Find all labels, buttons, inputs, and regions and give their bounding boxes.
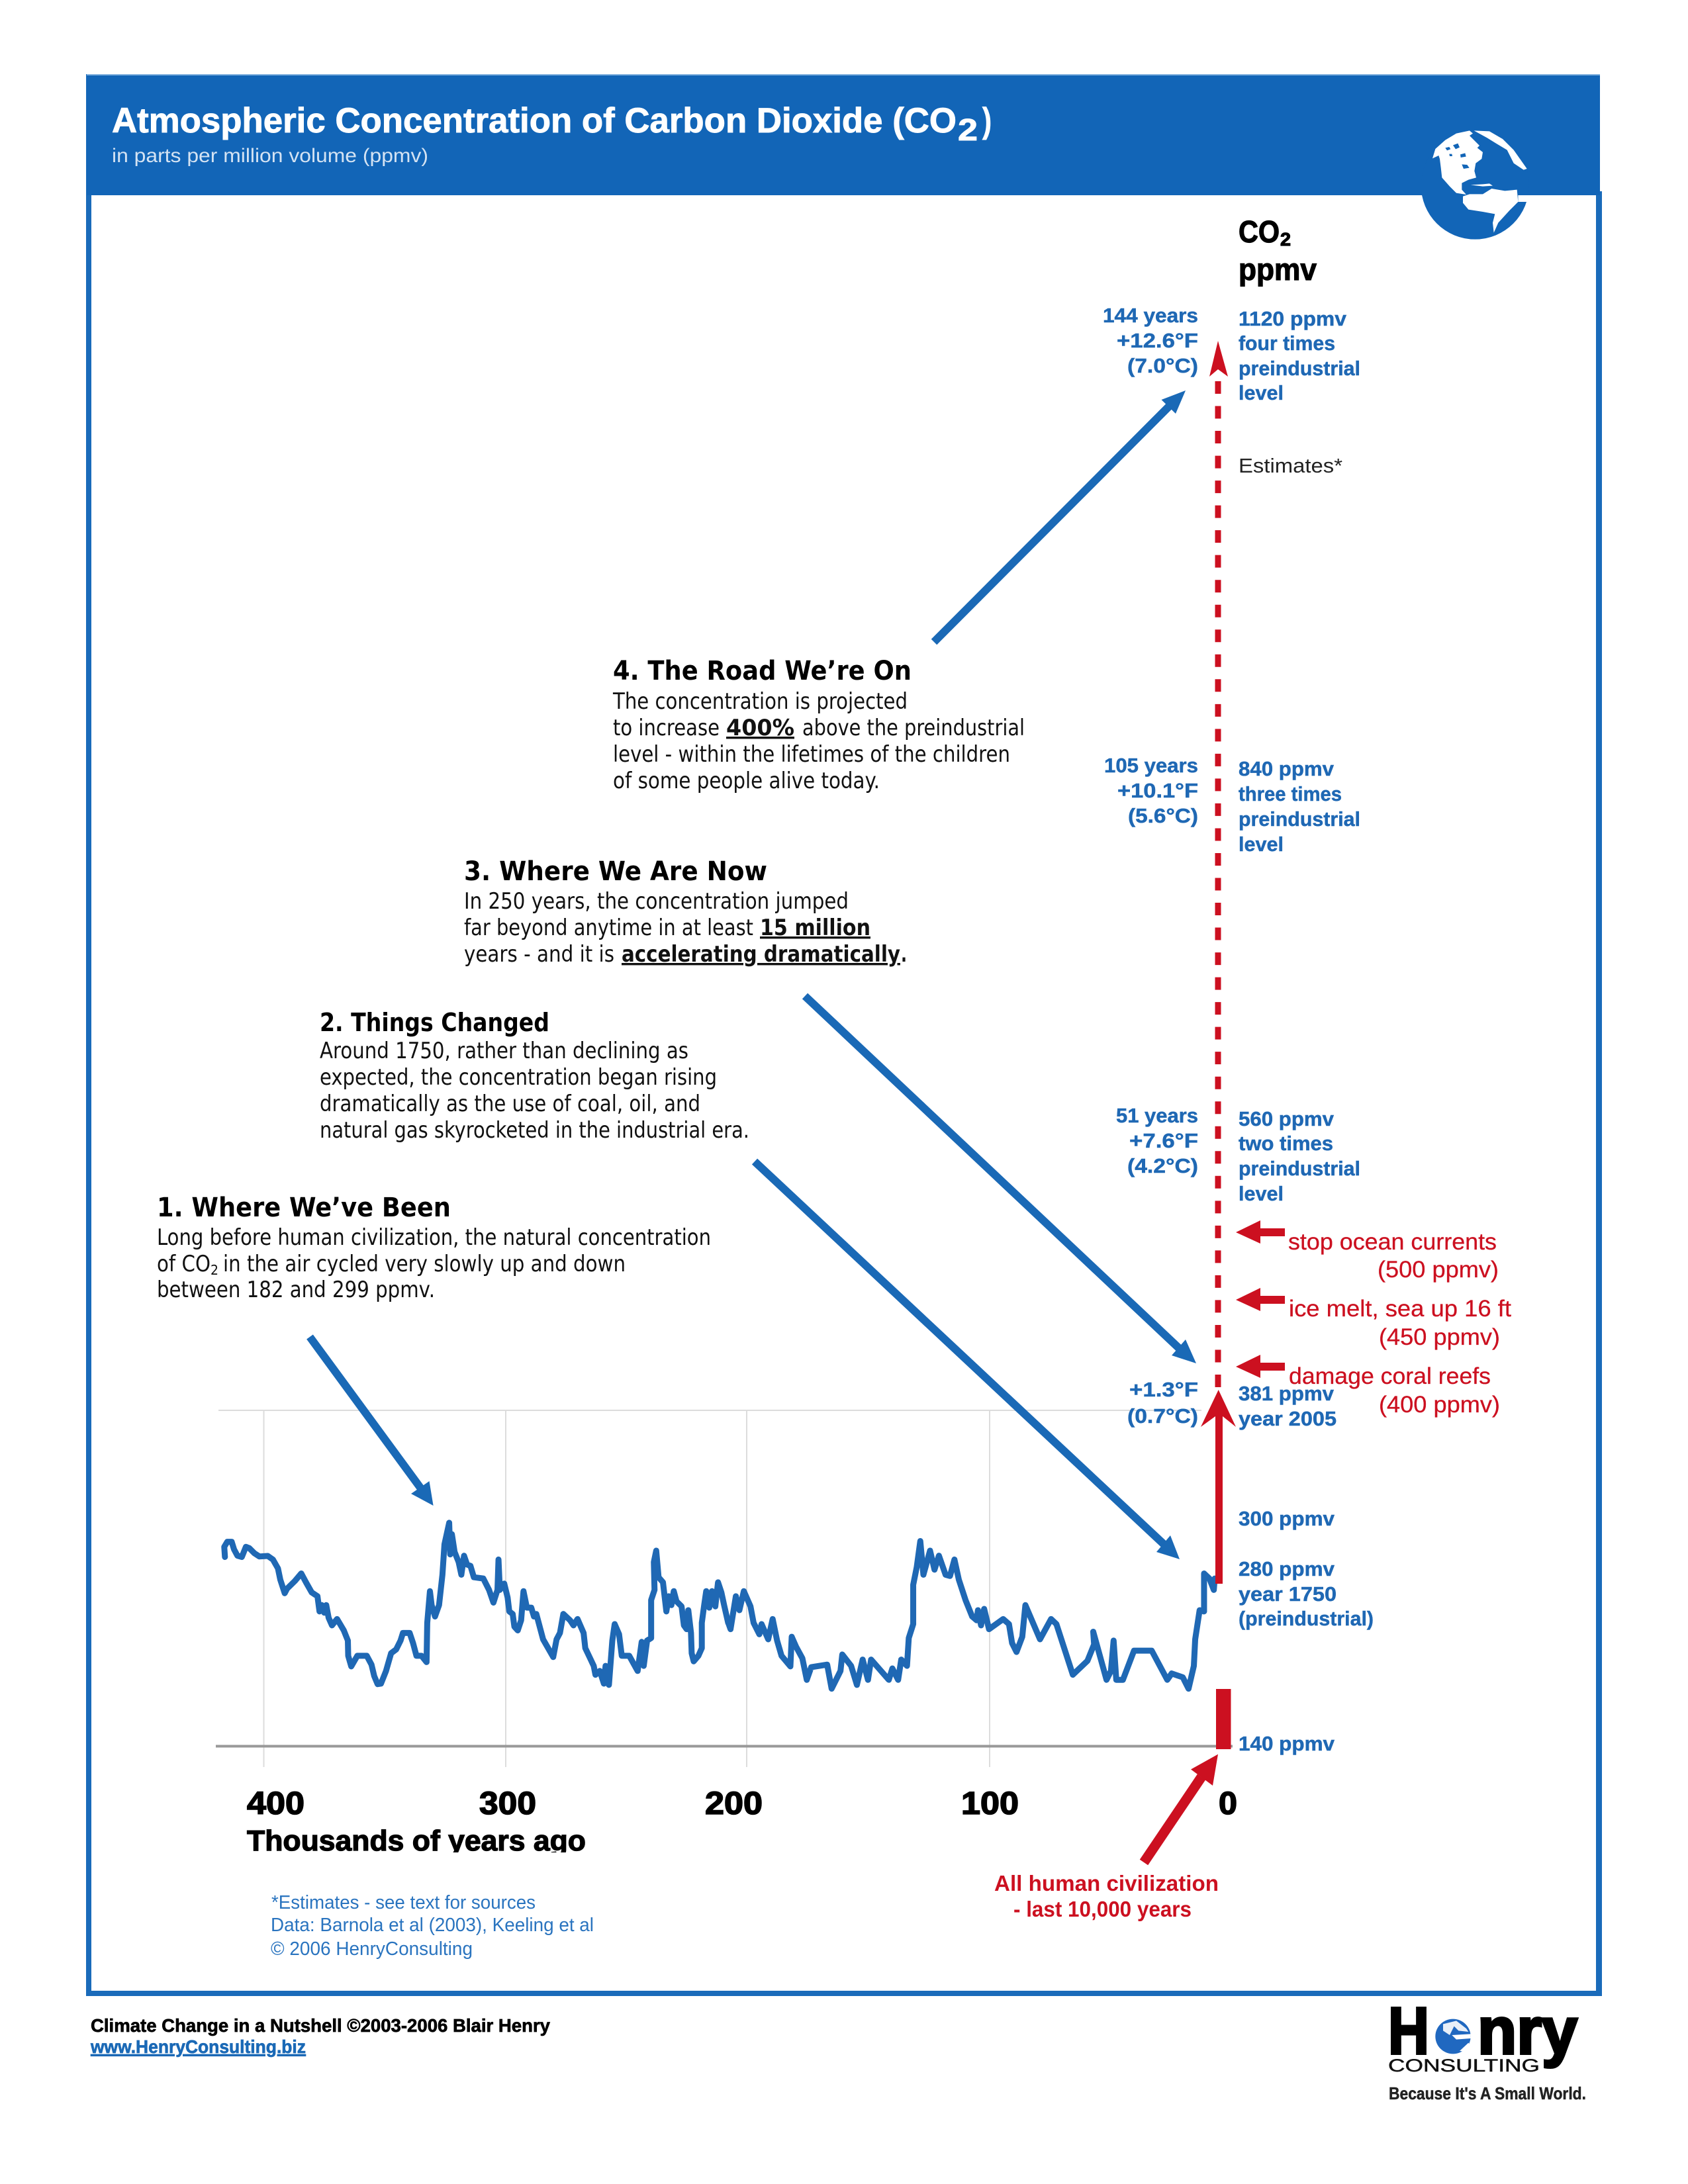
callout: 280 ppmv: [1239, 1557, 1374, 1630]
callout: 105 years: [1104, 754, 1198, 827]
text block: 3. Where We Are Now: accelerating dramatically: [622, 941, 900, 968]
text block: 3. Where We Are Now: 3. Where We Are Now: [464, 856, 767, 887]
callout: 51 years: +7.6°F: [1129, 1129, 1198, 1152]
arrow: projected rise head: [1209, 341, 1228, 377]
axis labels: 100: [961, 1786, 1019, 1821]
axis labels: 400: [247, 1786, 305, 1821]
source notes: © 2006 HenryConsulting: [271, 1938, 473, 1960]
callout: present warming: [1127, 1378, 1198, 1428]
text block: 2. Things Changed: natural gas skyrocketed in the industrial era.: [320, 1117, 749, 1144]
arrow: coral reefs: [1236, 1355, 1285, 1378]
text block: 3. Where We Are Now: .: [901, 941, 907, 968]
logo: Henry Consulting: CONSULTING: [1388, 2056, 1540, 2075]
line chart: CO2 over 400,000 years: [216, 1410, 1233, 1767]
data line, older half: [224, 1523, 728, 1685]
header banner: [87, 74, 1600, 195]
footer credit: Climate Change in a Nutshell ©2003-2006 Blair Henry: [91, 2015, 550, 2036]
text block: 3. Where We Are Now: years - and it is: [464, 941, 614, 968]
callout: 560 ppmv: 560 ppmv: [1239, 1107, 1335, 1130]
threshold: coral reefs: (400 ppmv): [1379, 1392, 1500, 1418]
text block: 2. Things Changed: dramatically as the use of coal, oil, and: [320, 1091, 700, 1117]
arrow: the road we're on: [934, 390, 1186, 642]
threshold: stop ocean currents: (500 ppmv): [1378, 1257, 1499, 1283]
text block: 4. The Road We're On: to increase: [613, 715, 720, 741]
axis labels: 200: [705, 1786, 763, 1821]
callout: 144 years: 144 years: [1103, 304, 1198, 327]
label: 300 ppmv: 300 ppmv: [1239, 1507, 1335, 1530]
title: Atmospheric Concentration of Carbon Dioxide (CO: [112, 101, 957, 140]
column heading: CO2 ppmv: CO: [1239, 214, 1280, 249]
callout: 840 ppmv: level: [1239, 833, 1284, 856]
text block: 1. Where We've Been: between 182 and 299 ppmv.: [157, 1277, 435, 1303]
text block: 1. Where We've Been: Long before human civilization, the natural concentration: [157, 1224, 711, 1251]
chart grid: [218, 1410, 1201, 1767]
callout: 381 ppmv: year 2005: [1239, 1407, 1336, 1430]
callout: 381 ppmv: 381 ppmv: [1239, 1382, 1335, 1405]
callout: 1120 ppmv: [1239, 307, 1360, 404]
text block: 4. The Road We're On: [612, 656, 1025, 794]
callout: 1120 ppmv: four times: [1239, 332, 1335, 355]
callout: 105 years: 105 years: [1104, 754, 1198, 777]
callout: 381 ppmv: [1239, 1382, 1336, 1430]
threshold: ice melt: (450 ppmv): [1379, 1324, 1500, 1350]
callout: 51 years: (4.2°C): [1127, 1154, 1198, 1177]
threshold: coral reefs: damage coral reefs: [1289, 1363, 1491, 1389]
estimates label: Estimates*: [1239, 454, 1342, 477]
column heading: CO2 ppmv: [1239, 214, 1317, 287]
axis labels: 300: [479, 1786, 536, 1821]
label: 140 ppmv: 140 ppmv: [1239, 1732, 1335, 1755]
arrow: where we are now: [805, 996, 1196, 1363]
data line, recent half: [728, 1541, 1215, 1689]
callout: 1120 ppmv: level: [1239, 381, 1284, 404]
callout: present warming: (0.7°C): [1127, 1404, 1198, 1428]
callout: 51 years: [1116, 1104, 1198, 1177]
callout: 840 ppmv: [1239, 757, 1360, 856]
text block: 2. Things Changed: [320, 1008, 749, 1144]
source notes: [271, 1892, 594, 1960]
callout: 280 ppmv: year 1750: [1239, 1582, 1336, 1606]
callout: all human civilization: [994, 1871, 1219, 1921]
arrow: human civilization: [1144, 1754, 1218, 1862]
callout: 560 ppmv: preindustrial: [1239, 1157, 1360, 1180]
text block: 1. Where We've Been: [157, 1193, 711, 1303]
text block: 3. Where We Are Now: In 250 years, the concentration jumped: [464, 888, 849, 915]
text block: 4. The Road We're On: 4. The Road We’re On: [613, 656, 912, 686]
callout: 840 ppmv: preindustrial: [1239, 807, 1360, 831]
subtitle: in parts per million volume (ppmv): [112, 145, 428, 167]
column heading: CO2 ppmv: 2: [1280, 229, 1291, 250]
icon: logo globe: [1435, 2019, 1471, 2054]
text block: 1. Where We've Been: of CO: [157, 1251, 211, 1277]
callout: 560 ppmv: level: [1239, 1182, 1284, 1205]
callout: present warming: +1.3°F: [1129, 1378, 1198, 1401]
axis title: Thousands of years ago: [247, 1825, 586, 1857]
callout: 105 years: +10.1°F: [1117, 779, 1198, 802]
callout: 280 ppmv: (preindustrial): [1239, 1607, 1374, 1630]
text block: 3. Where We Are Now: [464, 856, 907, 968]
arrow: stop ocean currents: [1236, 1220, 1285, 1244]
axis labels: 0: [1219, 1786, 1237, 1821]
title: ): [982, 101, 992, 140]
callout: 105 years: (5.6°C): [1128, 804, 1198, 827]
callout: 144 years: (7.0°C): [1127, 354, 1198, 377]
callout: all human civilization: - last 10,000 years: [1013, 1897, 1192, 1921]
text block: 1. Where We've Been: 2: [211, 1262, 218, 1278]
text block: 3. Where We Are Now: far beyond anytime in at least: [464, 915, 753, 941]
text block: 4. The Road We're On: 400%: [726, 715, 794, 741]
text block: 1. Where We've Been: in the air cycled very slowly up and down: [223, 1251, 626, 1277]
callout: all human civilization: All human civilization: [994, 1871, 1219, 1895]
arrow: where we've been: [310, 1337, 434, 1506]
panel frame: [86, 74, 1602, 1996]
text block: 3. Where We Are Now: 15 million: [760, 915, 870, 941]
text block: 4. The Road We're On: above the preindustrial: [802, 715, 1025, 741]
threshold: coral reefs: [1289, 1363, 1500, 1418]
arrow: things changed: [755, 1161, 1180, 1559]
footer credit: www.HenryConsulting.biz: [90, 2036, 306, 2057]
callout: 560 ppmv: two times: [1239, 1132, 1333, 1155]
footer credit: [90, 2015, 550, 2057]
callout: 280 ppmv: 280 ppmv: [1239, 1557, 1335, 1580]
icon: globe: [1421, 130, 1538, 240]
dashed projection line: [1215, 381, 1221, 1387]
text block: 2. Things Changed: expected, the concentration began rising: [320, 1064, 717, 1091]
text block: 2. Things Changed: 2. Things Changed: [320, 1008, 549, 1037]
text block: 2. Things Changed: Around 1750, rather than declining as: [320, 1038, 688, 1064]
threshold: stop ocean currents: stop ocean currents: [1288, 1229, 1497, 1255]
callout: 144 years: +12.6°F: [1117, 329, 1198, 352]
logo: Henry Consulting: H: [1388, 1994, 1429, 2068]
text block: 4. The Road We're On: of some people alive today.: [613, 768, 880, 794]
threshold: ice melt: ice melt, sea up 16 ft: [1289, 1296, 1511, 1322]
callout: 840 ppmv: 840 ppmv: [1239, 757, 1335, 780]
callout: 560 ppmv: [1239, 1107, 1360, 1205]
logo: Henry Consulting: Because It's A Small World.: [1389, 2083, 1586, 2103]
source notes: Data: Barnola et al (2003), Keeling et al: [271, 1915, 594, 1936]
text block: 4. The Road We're On: The concentration is projected: [612, 688, 908, 715]
callout: 1120 ppmv: preindustrial: [1239, 357, 1360, 380]
icon: civilization bar: [1216, 1689, 1231, 1749]
text block: 4. The Road We're On: level - within the lifetimes of the children: [613, 741, 1010, 768]
text block: 1. Where We've Been: 1. Where We’ve Been: [157, 1193, 451, 1223]
column heading: CO2 ppmv: ppmv: [1239, 252, 1317, 287]
source notes: *Estimates - see text for sources: [271, 1892, 536, 1913]
callout: 1120 ppmv: 1120 ppmv: [1239, 307, 1347, 330]
title: 2: [958, 113, 978, 147]
arrow: measured rise: [1201, 1390, 1236, 1584]
callout: 840 ppmv: three times: [1239, 782, 1342, 805]
chart axis: [216, 1745, 1233, 1747]
threshold: stop ocean currents: [1288, 1229, 1499, 1283]
callout: 144 years: [1103, 304, 1198, 377]
callout: 51 years: 51 years: [1116, 1104, 1198, 1127]
axis labels: [247, 1786, 1237, 1821]
threshold: ice melt: [1289, 1296, 1511, 1350]
logo: Henry Consulting: [1388, 1994, 1586, 2103]
logo: Henry Consulting: nry: [1477, 1994, 1577, 2068]
arrow: ice melt: [1236, 1288, 1285, 1311]
